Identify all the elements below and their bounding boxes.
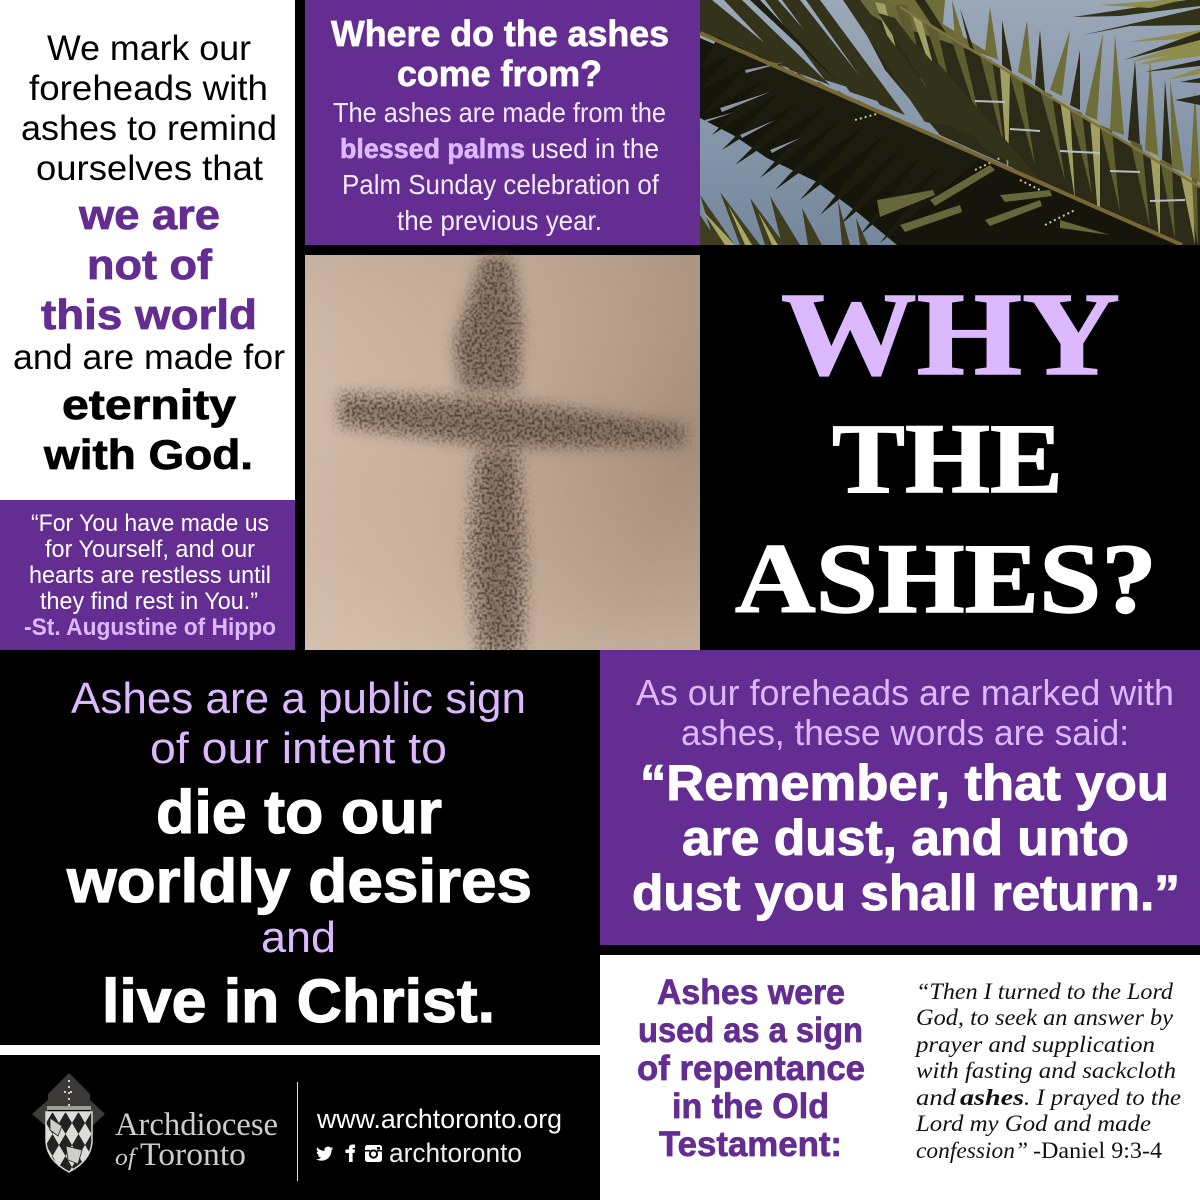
title: ASHES?: ASHES?: [735, 523, 1157, 634]
scripture quote: . I prayed to the: [1024, 1085, 1181, 1110]
divider line: [297, 1082, 298, 1181]
lead text: ashes, these words are said:: [681, 712, 1129, 753]
scripture quote: with fasting and sackcloth: [916, 1058, 1176, 1083]
bottom left frond: [700, 192, 868, 245]
heading: ashes as sign of repentance: Testament:: [659, 1125, 842, 1164]
highlight: eternity with God: with God.: [43, 431, 253, 478]
icon: facebook: [346, 1144, 355, 1162]
second frond downward leaflets: [895, 5, 1198, 245]
lead text: of our intent to: [150, 724, 447, 773]
footer background: [0, 1055, 600, 1200]
scripture quote: ashes: [960, 1085, 1024, 1110]
sky slits behind second frond: [975, 100, 1185, 202]
emphasis: die to our worldly desires: worldly desires: [66, 847, 532, 915]
highlight: we are not of this world: not of: [87, 241, 213, 288]
quote: remember you are dust: [632, 755, 1180, 921]
body text: Palm Sunday celebration of: [342, 169, 659, 200]
intro text: [21, 29, 277, 188]
skin tone: [305, 255, 700, 650]
heading: ashes as sign of repentance: of repentance: [637, 1049, 865, 1088]
quote attribution: -St. Augustine of Hippo: [24, 614, 276, 641]
panel: Augustine quote: [0, 500, 295, 650]
quote text: “For You have made us: [31, 510, 269, 537]
lead text: [71, 674, 526, 773]
scripture quote: “Then I turned to the Lord: [916, 979, 1174, 1004]
quote text: [29, 510, 271, 615]
scripture quote: [914, 979, 1181, 1163]
lead text: As our foreheads are marked with: [636, 672, 1174, 713]
title: WHY: WHY: [781, 268, 1120, 400]
quote: remember you are dust: are dust, and unto: [682, 810, 1129, 866]
emphasis: live in Christ: live in Christ.: [102, 967, 495, 1035]
quote text: for Yourself, and our: [45, 536, 255, 563]
logo wordmark: Toronto: [140, 1137, 246, 1173]
intro text: ashes to remind: [21, 109, 277, 148]
scripture quote: -Daniel 9:3-4: [1033, 1138, 1163, 1163]
top right frond: [1073, 0, 1200, 35]
panel: title: [700, 245, 1200, 650]
body text: blessed palms: [340, 133, 525, 164]
emphasis: die to our worldly desires: [66, 778, 532, 915]
white divider under public sign panel: [0, 1045, 600, 1055]
panel: footer: [0, 1055, 600, 1200]
quote text: hearts are restless until: [29, 562, 271, 589]
scripture quote: confession”: [916, 1138, 1028, 1163]
highlight: eternity with God: [43, 381, 253, 478]
quote: remember you are dust: dust you shall return.”: [632, 865, 1180, 921]
photo: ash cross on forehead: [305, 255, 700, 655]
scripture quote: Lord my God and made: [915, 1111, 1151, 1136]
scripture quote: God, to seek an answer by: [916, 1005, 1174, 1030]
grainy ash cross: [338, 256, 688, 655]
main frond dark base: [700, 38, 1182, 245]
heading: ashes as sign of repentance: [637, 973, 865, 1164]
highlight: we are not of this world: [41, 191, 257, 338]
icon: archdiocese crest: [32, 1073, 105, 1172]
panel background: [600, 955, 1200, 1200]
scripture quote: and: [916, 1085, 957, 1110]
second frond rachis: [900, 7, 1200, 187]
intro text: foreheads with: [29, 69, 268, 108]
panel background: [305, 0, 700, 245]
heading: ashes as sign of repentance: Ashes were: [657, 973, 845, 1012]
sky slits in lower leaflets: [705, 62, 800, 153]
panel background: [0, 650, 600, 1045]
intro text: ourselves that: [36, 149, 263, 188]
panel background: [0, 0, 295, 500]
heading: ashes as sign of repentance: used as a sign: [638, 1011, 863, 1050]
lead text: Ashes are a public sign: [71, 674, 526, 723]
body text: used in the: [531, 133, 659, 164]
quote text: they find rest in You.”: [40, 588, 258, 615]
title: THE: THE: [832, 403, 1063, 514]
emphasis: die to our worldly desires: die to our: [156, 778, 442, 846]
highlight: we are not of this world: we are: [78, 191, 220, 238]
quote background: [0, 500, 295, 650]
logo wordmark: [115, 1107, 278, 1173]
text: and: and: [261, 913, 336, 962]
panel: public sign: [0, 650, 600, 1045]
sunlit leaflet highlights: [877, 165, 1110, 235]
logo wordmark: of: [115, 1145, 139, 1171]
intro text: We mark our: [47, 29, 251, 68]
second frond upward leaflets: [885, 0, 1200, 182]
highlight: we are not of this world: this world: [41, 291, 257, 338]
heading: [331, 13, 669, 94]
heading: ashes as sign of repentance: in the Old: [672, 1087, 829, 1126]
website: www.archtoronto.org: [316, 1104, 562, 1134]
logo wordmark: Archdiocese: [115, 1107, 278, 1143]
title background: [700, 245, 1200, 650]
soft smudge of the cross: [340, 258, 684, 648]
body text: the previous year.: [397, 205, 602, 236]
highlight: eternity with God: eternity: [62, 381, 237, 428]
photo: palm fronds against sky: [700, 0, 1200, 245]
main frond upper leaflets: [700, 0, 1045, 185]
heading: Where do the ashes: [331, 13, 669, 54]
panel: where do the ashes come from: [305, 0, 700, 245]
body text: [333, 97, 666, 236]
panel: words said: [600, 650, 1200, 945]
scripture quote: prayer and supplication: [914, 1032, 1155, 1057]
main frond rachis: [700, 33, 1182, 245]
lead text: [636, 672, 1174, 753]
panel background: [600, 650, 1200, 945]
panel: old testament: [600, 955, 1200, 1200]
second frond dark mass: [850, 3, 1200, 245]
quote: remember you are dust: “Remember, that you: [640, 755, 1169, 811]
body text: The ashes are made from the: [333, 97, 666, 128]
heading: come from?: [397, 53, 602, 94]
social handle: archtoronto: [389, 1138, 522, 1168]
panel: we mark our foreheads: [0, 0, 295, 500]
icon: twitter: [316, 1147, 333, 1161]
text: and are made for: and are made for: [13, 338, 285, 377]
second frond upper region fill: [845, 0, 1000, 60]
icon: instagram: [365, 1145, 382, 1162]
main frond lower leaflets: [700, 37, 982, 243]
